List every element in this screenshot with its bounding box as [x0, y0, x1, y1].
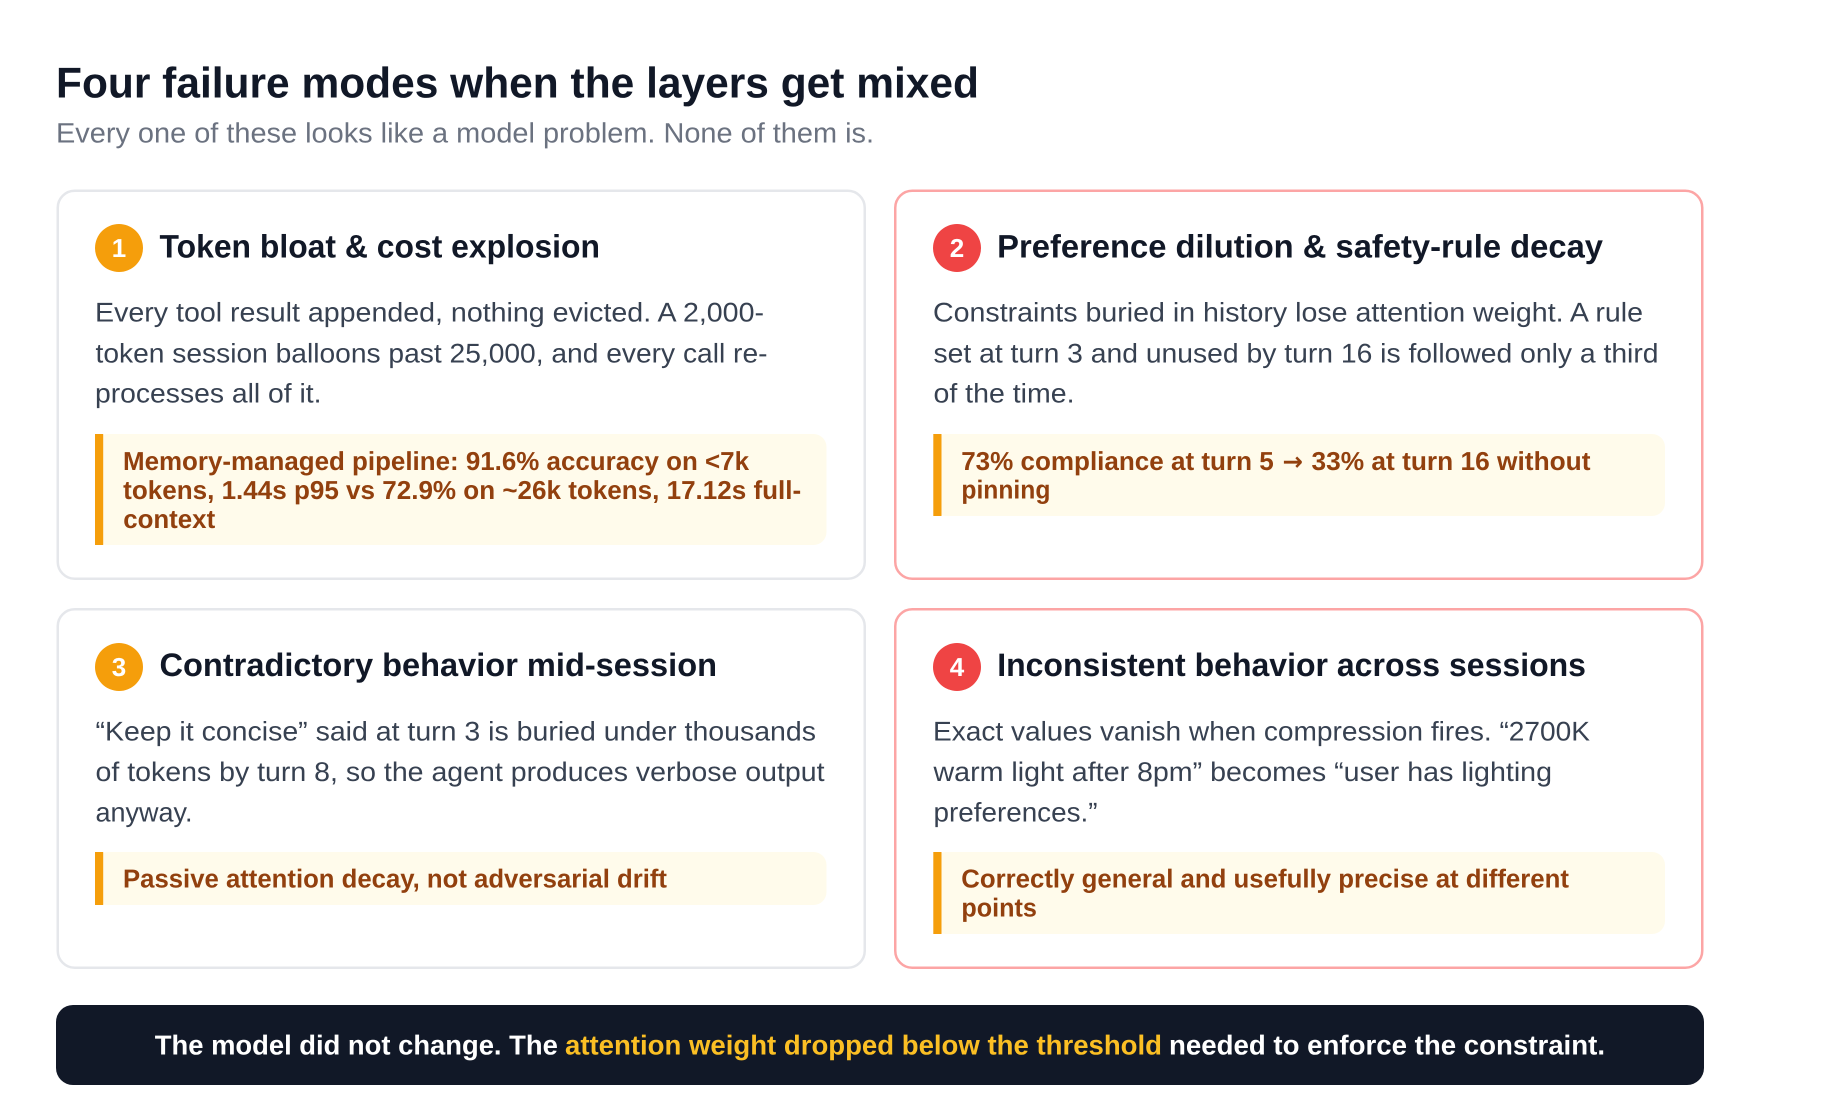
callout: token bloat evidence: tokens, 1.44s p95 vs 72.9% on ~26k tokens, 17.12s full- [123, 475, 801, 505]
callout: general and precise: points [961, 892, 1037, 922]
body text: contradictory behavior: anyway. [96, 798, 192, 828]
icon: number 4 badge: 4 [950, 652, 965, 682]
panel: token bloat [58, 191, 865, 579]
body text: token bloat [95, 298, 768, 409]
callout: general and precise [933, 852, 1665, 934]
body text: preference dilution: Constraints buried in history lose attention weight. A rule [933, 298, 1643, 328]
body text: inconsistent behavior: warm light after 8pm” becomes “user has lighting [932, 757, 1552, 787]
body text: contradictory behavior [96, 717, 825, 828]
heading: inconsistent behavior: Inconsistent behavior across sessions [997, 647, 1586, 683]
body text: token bloat: Every tool result appended, nothing evicted. A 2,000- [95, 298, 764, 328]
callout: compliance evidence [933, 434, 1665, 516]
icon: number 4 badge [933, 643, 981, 691]
icon: number 1 badge [95, 224, 143, 272]
subtitle: Every one of these looks like a model problem. None of them is. [56, 118, 874, 148]
panel: preference dilution [895, 191, 1702, 579]
body text: inconsistent behavior: Exact values vanish when compression fires. “2700K [933, 717, 1590, 747]
body text: contradictory behavior: “Keep it concise” said at turn 3 is buried under thousands [96, 717, 816, 747]
panel: contradictory behavior [58, 609, 865, 968]
heading: preference dilution: Preference dilution & safety-rule decay [997, 228, 1603, 264]
banner: conclusion: The model did not change. The [155, 1029, 558, 1060]
body text: inconsistent behavior [932, 717, 1590, 828]
body text: inconsistent behavior: preferences.” [934, 798, 1098, 828]
body text: preference dilution: set at turn 3 and unused by turn 16 is followed only a third [934, 338, 1658, 368]
icon: number 3 badge [95, 643, 143, 691]
heading: contradictory behavior: Contradictory behavior mid-session [160, 647, 717, 683]
body text: preference dilution: of the time. [934, 378, 1074, 408]
banner: conclusion: attention weight dropped below the threshold [565, 1029, 1162, 1060]
banner: conclusion: needed to enforce the constraint. [1169, 1029, 1605, 1060]
callout: general and precise: Correctly general and usefully precise at different [961, 863, 1569, 893]
callout: attention decay: Passive attention decay, not adversarial drift [123, 863, 667, 893]
callout: attention decay [95, 852, 826, 905]
icon: number 1 badge: 1 [112, 233, 126, 263]
callout: compliance evidence: → [1282, 447, 1303, 476]
body text: token bloat: processes all of it. [95, 379, 322, 409]
callout: token bloat evidence [95, 434, 826, 545]
banner: conclusion [56, 1005, 1704, 1085]
callout: compliance evidence: pinning [961, 475, 1050, 505]
callout: compliance evidence: 73% compliance at turn 5 [961, 446, 1274, 476]
body text: contradictory behavior: of tokens by turn 8, so the agent produces verbose output [96, 757, 825, 787]
callout: token bloat evidence: context [123, 504, 216, 534]
heading: token bloat: Token bloat & cost explosion [160, 228, 600, 264]
callout: compliance evidence: 33% at turn 16 without [1312, 446, 1591, 476]
icon: number 3 badge: 3 [112, 652, 126, 682]
body text: token bloat: token session balloons past 25,000, and every call re- [96, 338, 768, 368]
icon: number 2 badge: 2 [950, 233, 964, 263]
icon: number 2 badge [933, 224, 981, 272]
body text: preference dilution [933, 298, 1658, 408]
title: Four failure modes when the layers get mixed [56, 60, 979, 108]
callout: token bloat evidence: Memory-managed pipeline: 91.6% accuracy on <7k [123, 446, 750, 476]
panel: inconsistent behavior [895, 609, 1702, 968]
